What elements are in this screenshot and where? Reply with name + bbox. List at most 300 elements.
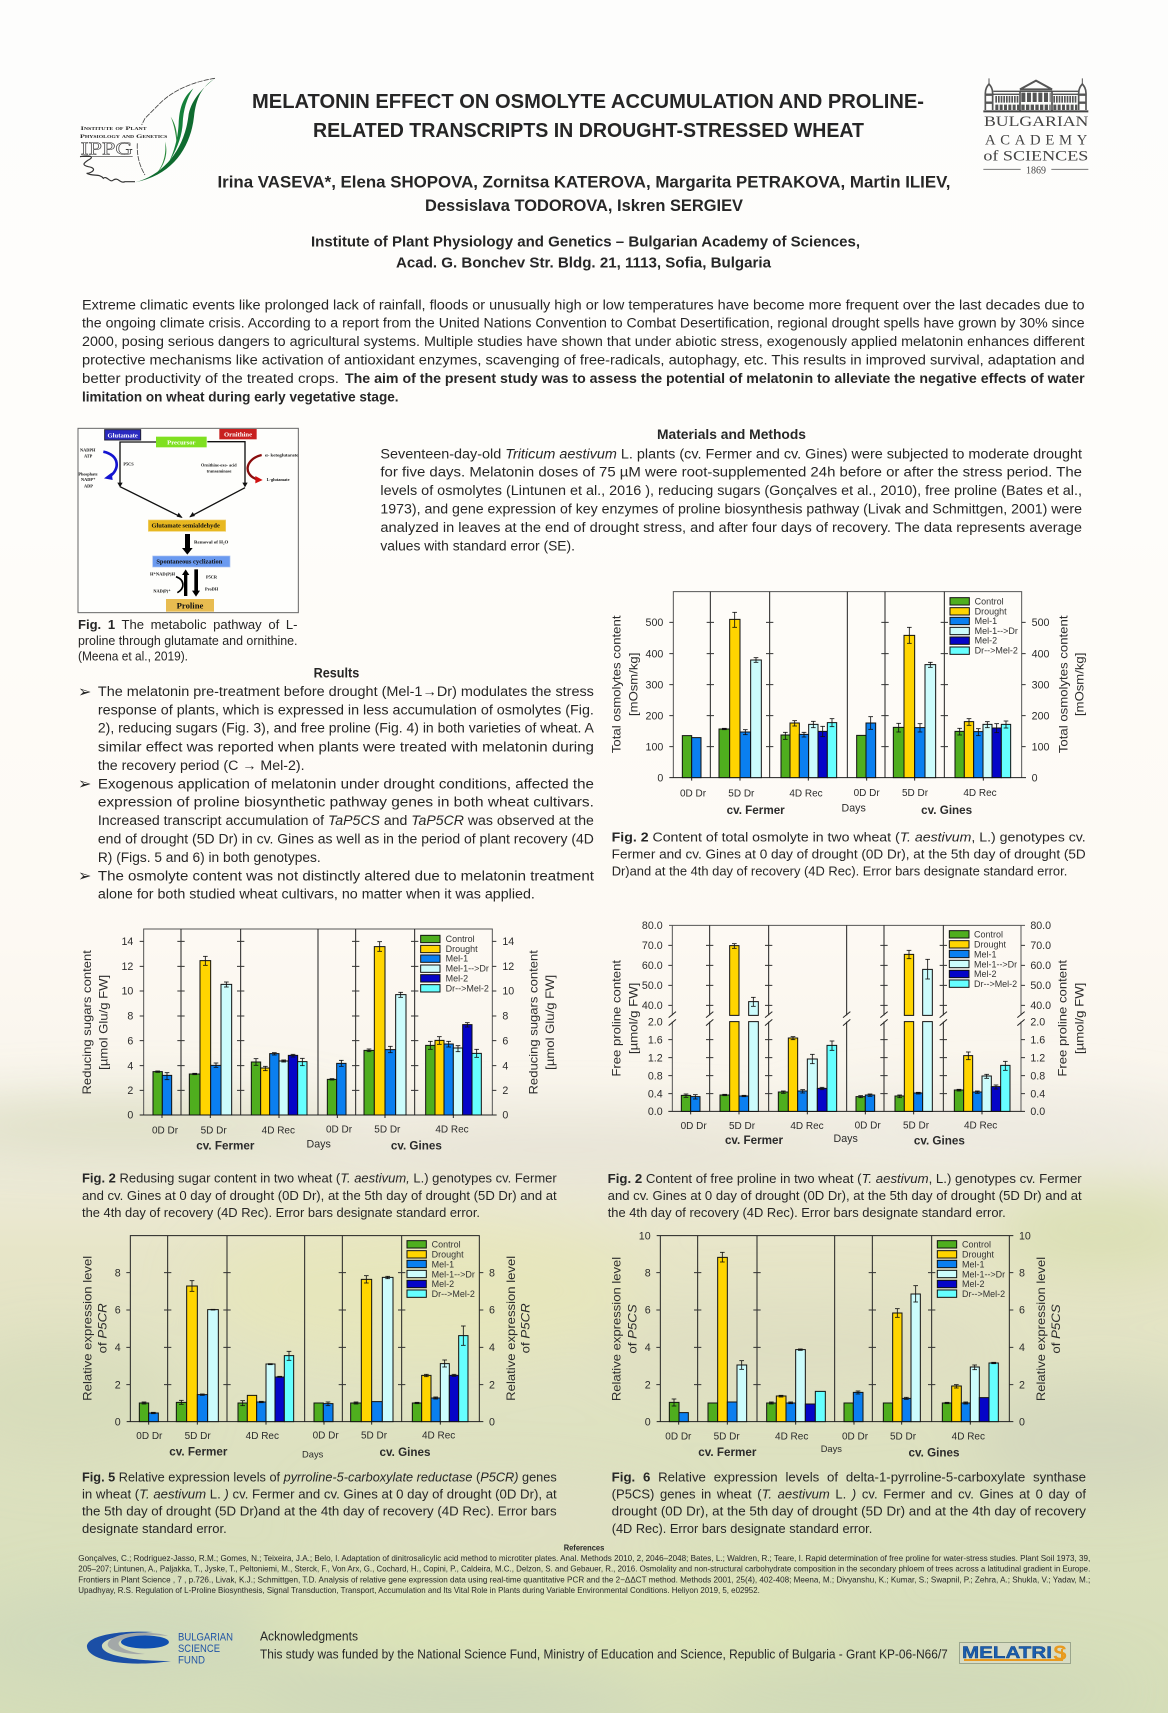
y axis labels: of P5CR: [97, 1303, 110, 1353]
introduction text: the ongoing climate crisis. According to a report from the United Nations Convention to Combat Desertification, regional drought spells have grown by 30% since: [82, 316, 1085, 331]
caption: reducing sugar: [82, 1171, 557, 1220]
legend: Mel-1: [446, 954, 468, 964]
y axis labels: 50.0: [642, 980, 663, 992]
y axis labels: 60.0: [642, 960, 663, 972]
results: Exogenous application of melatonin under drought conditions, affected the: [98, 776, 594, 791]
y axis labels: 1.2: [1030, 1052, 1045, 1064]
legend: Mel-1-->Dr: [975, 626, 1018, 636]
caption: reducing sugar: and cv. Gines at 0 day of drought (0D Dr), at the 5th day of drought (5D Dr) and at: [82, 1188, 557, 1203]
y axis labels: 70.0: [1030, 940, 1051, 952]
results: [78, 666, 594, 902]
materials and methods: for five days. Melatonin doses of 75 µM were root-supplemented 24h before or after the stress period. The: [380, 465, 1082, 480]
y axis labels: 400: [1032, 648, 1050, 660]
legend: Control: [974, 930, 1003, 940]
y axis labels: 300: [646, 679, 663, 691]
x axis labels: 0D Dr: [665, 1431, 692, 1442]
materials and methods: Materials and Methods: [657, 427, 806, 442]
y axis labels: 8: [115, 1267, 121, 1279]
legend: Dr-->Mel-2: [975, 646, 1018, 656]
references: 205–207; Lintunen, A., Paljakka, T., Jyske, T., Peltoniemi, M., Sterck, F., Von Arx, G., Cochard, H., Copini, P., Caldeira, M.C., Delzon, S. and Gebauer, R., 2016. Osmolality and non-structural carbohydrate composition in the secondary phloem of trees across a latitudinal gradient in Europe.: [78, 1565, 1090, 1574]
y axis labels: 4: [115, 1342, 121, 1354]
x axis labels: 5D Dr: [728, 789, 755, 800]
legend: Control: [975, 596, 1004, 606]
x axis labels: [681, 1120, 997, 1148]
x axis labels: cv. Fermer: [169, 1445, 228, 1458]
legend: [421, 934, 489, 993]
legend: Mel-1-->Dr: [446, 964, 489, 974]
introduction text: The aim of the present study was to assess the potential of melatonin to alleviate the negative effects of water: [345, 371, 1085, 386]
y axis labels: 60.0: [1030, 960, 1051, 972]
logo: Bulgarian Academy of Sciences: of SCIENCES: [983, 149, 1088, 165]
y axis labels: [µmol/g FW]: [1073, 983, 1086, 1054]
x axis labels: 4D Rec: [262, 1125, 295, 1136]
legend: Drought: [975, 606, 1007, 616]
caption: figure 6: (P5CS) genes in wheat (T. aestivum L. ) cv. Fermer and cv. Gines at 0 day of: [612, 1486, 1086, 1501]
materials and methods: Seventeen-day-old Triticum aestivum L. plants (cv. Fermer and cv. Gines) were subjected to moderate drought: [380, 446, 1082, 461]
y axis labels: 500: [646, 617, 663, 629]
affiliation: Institute of Plant Physiology and Genetics – Bulgarian Academy of Sciences,: [311, 234, 860, 250]
x axis labels: cv. Fermer: [725, 1134, 784, 1147]
y axis labels: 10: [639, 1230, 651, 1242]
y axis labels: 12: [502, 961, 514, 973]
references: Gonçalves, C.; Rodriguez-Jasso, R.M.; Gomes, N.; Teixeira, J.A.; Belo, I. Adaptation of dinitrosalicylic acid method to microtiter plates. Anal. Methods 2010, 2, 2046–2048; Bates, L.; Waldren, R.; Teare, I. Rapid determination of free proline for water-stress studies. Plant Soil 1973, 39,: [78, 1554, 1090, 1563]
legend: Mel-2: [975, 636, 997, 646]
figure 1: proline metabolic pathway: α- ketoglutarate: [265, 453, 298, 458]
y axis labels: 0.4: [1030, 1088, 1045, 1100]
y axis labels: 8: [127, 1011, 133, 1023]
figure 1 caption: (Meena et al., 2019).: [78, 649, 188, 664]
figure 1: proline metabolic pathway: H⁺NAD(P)H: [150, 572, 176, 577]
legend: Control: [962, 1240, 991, 1250]
figure 1: proline metabolic pathway: Proline: [177, 601, 204, 611]
authors: Irina VASEVA*, Elena SHOPOVA, Zornitsa KATEROVA, Margarita PETRAKOVA, Martin ILIEV,: [218, 174, 950, 192]
y axis labels: Total osmolytes content: [1057, 615, 1070, 753]
y axis labels: [mOsm/kg]: [627, 653, 640, 716]
y axis labels: Reducing sugars content: [528, 949, 541, 1094]
y axis labels: [81, 936, 557, 1122]
y axis labels: [611, 615, 1087, 784]
introduction text: Extreme climatic events like prolonged lack of rainfall, floods or unusually high or low temperatures have become more frequent over the last decades due to: [82, 297, 1085, 312]
bars: [682, 612, 1011, 778]
y axis labels: 0.0: [1030, 1106, 1045, 1118]
figure 1: proline metabolic pathway: NADPH: [80, 448, 96, 453]
y axis labels: Free proline content: [1057, 959, 1070, 1077]
y axis labels: 1.6: [648, 1034, 663, 1046]
chart: reducing sugars content: [81, 929, 557, 1152]
y axis labels: 6: [489, 1305, 495, 1317]
caption: figure 5: [82, 1469, 557, 1536]
y axis labels: 8: [489, 1267, 495, 1279]
y axis labels: 100: [646, 741, 663, 753]
y axis labels: Total osmolytes content: [611, 615, 624, 753]
y axis labels: 8: [1019, 1267, 1025, 1279]
legend: [407, 1240, 475, 1299]
legend: Mel-1-->Dr: [974, 959, 1017, 969]
y axis labels: Relative expression level: [81, 1256, 94, 1401]
y axis labels: 0: [489, 1416, 495, 1428]
y axis labels: 0: [127, 1110, 133, 1122]
results: ➢: [78, 682, 91, 701]
legend: Dr-->Mel-2: [962, 1289, 1005, 1299]
y axis labels: 200: [646, 710, 663, 722]
x axis labels: 4D Rec: [963, 788, 997, 799]
y axis labels: 0: [1032, 772, 1038, 784]
y axis labels: 6: [127, 1035, 133, 1047]
introduction text: limitation on wheat during early vegetative stage.: [82, 390, 398, 405]
x axis labels: [136, 1430, 455, 1460]
results: expression of proline biosynthetic pathway genes in both wheat cultivars.: [98, 795, 594, 810]
y axis labels: 10: [502, 986, 514, 998]
x axis labels: cv. Gines: [391, 1139, 442, 1152]
y axis labels: 100: [1032, 741, 1050, 753]
caption: reducing sugar: Fig. 2 Redusing sugar content in two wheat (T. aestivum, L.) genotypes cv. Fermer: [82, 1171, 557, 1186]
references: Frontiers in Plant Science , 7 , p.726., Livak, K.J.; Schmittgen, T.D. Analysis of relative gene expression data using real-time quantitative PCR and the 2−ΔΔCT method. Methods 2001, 25(4), 402-408; Meena, M.; Divyanshu, K.; Kumar, S.; Swapnil, P.; Zehra, A.; Shukla, V.; Yadav, M.;: [78, 1575, 1090, 1584]
figure 1: proline metabolic pathway: P5CS: [123, 461, 134, 466]
chart: total osmolytes content: [611, 592, 1087, 817]
x axis labels: 4D Rec: [789, 789, 823, 800]
results: the recovery period (C → Mel-2).: [98, 758, 305, 773]
logo: MelaTriS: S: [1053, 1642, 1067, 1665]
y axis labels: 50.0: [1030, 980, 1051, 992]
caption: total osmolyte: [612, 830, 1086, 879]
y axis labels: [611, 1230, 1063, 1428]
y axis labels: 6: [502, 1035, 508, 1047]
y axis labels: 0.0: [648, 1106, 663, 1118]
y axis labels: [mOsm/kg]: [1074, 653, 1087, 716]
y axis labels: of P5CS: [1050, 1304, 1063, 1354]
x axis labels: 0D Dr: [681, 1121, 707, 1132]
logo: MelaTriS: MELATRI: [962, 1643, 1052, 1662]
results: end of drought (5D Dr) in cv. Gines as well as in the period of plant recovery (4D: [98, 832, 594, 847]
figure 1: proline metabolic pathway: Ornithine-oxo- acid: [201, 462, 237, 467]
title: RELATED TRANSCRIPTS IN DROUGHT-STRESSED WHEAT: [313, 119, 864, 142]
introduction text: 2000, posing serious dangers to agricultural systems. Multiple studies have shown that under abiotic stress, exogenously applied melatonin enhances different: [82, 334, 1085, 349]
y axis labels: 1.6: [1030, 1034, 1045, 1046]
results: alone for both studied wheat cultivars, no matter when it was applied.: [98, 887, 535, 902]
acknowledgments: This study was funded by the National Science Fund, Ministry of Education and Science, Republic of Bulgaria - Grant KP-06-N66/7: [260, 1647, 948, 1662]
y axis labels: 500: [1032, 617, 1050, 629]
x axis labels: 0D Dr: [152, 1125, 179, 1136]
title: [252, 90, 924, 142]
legend: Control: [446, 934, 475, 944]
x axis labels: 5D Dr: [714, 1431, 740, 1442]
y axis labels: 0.8: [648, 1070, 663, 1082]
x axis labels: 0D Dr: [855, 1120, 881, 1131]
figure 1: proline metabolic pathway: NADP⁺: [81, 477, 95, 482]
logo: Bulgarian Academy of Sciences: BULGARIAN: [984, 114, 1089, 130]
y axis labels: 6: [645, 1305, 651, 1317]
legend: [937, 1240, 1005, 1299]
x axis labels: 5D Dr: [729, 1121, 756, 1132]
y axis labels: 14: [502, 936, 514, 948]
y axis labels: 0: [502, 1110, 508, 1122]
figure 1: proline metabolic pathway: Removal of H₂O: [194, 540, 229, 545]
y axis labels: 2: [1019, 1379, 1025, 1391]
caption: total osmolyte: Fermer and cv. Gines at 0 day of drought (0D Dr), at the 5th day of drought (5D: [612, 847, 1086, 862]
y axis labels: 1.2: [648, 1052, 663, 1064]
figure 1: proline metabolic pathway: Spontaneous cyclization: [156, 558, 223, 565]
legend: Mel-1-->Dr: [432, 1269, 475, 1279]
legend: Dr-->Mel-2: [974, 979, 1017, 989]
references: Upadhyay, R.S. Regulation of L-Proline Biosynthesis, Signal Transduction, Transport, Accumulation and Its Vital Role in Plants during Variable Environmental Conditions. Heliyon 2019, 5, e02952.: [78, 1586, 760, 1595]
legend: Drought: [432, 1250, 464, 1260]
legend: Mel-1: [974, 949, 996, 959]
y axis labels: 0.4: [648, 1088, 663, 1100]
bars: [669, 1252, 998, 1422]
logo: Bulgarian Academy of Sciences: 1869: [1026, 165, 1046, 176]
x axis labels: 4D Rec: [790, 1121, 824, 1132]
y axis labels: Reducing sugars content: [81, 949, 94, 1094]
x axis labels: 0D Dr: [680, 789, 707, 800]
y axis labels: 4: [502, 1060, 508, 1072]
affiliation: [311, 234, 860, 272]
caption: reducing sugar: the 4th day of recovery (4D Rec). Error bars designate standard error.: [82, 1205, 480, 1220]
materials and methods: values with standard error (SE).: [380, 538, 575, 553]
legend: Dr-->Mel-2: [446, 983, 489, 993]
figure 1: proline metabolic pathway: ATP: [84, 454, 93, 459]
caption: figure 6: [612, 1469, 1087, 1536]
logo: Institute of Plant Physiology and Genetics: [80, 78, 215, 182]
x axis labels: 0D Dr: [326, 1125, 353, 1136]
introduction text: [82, 297, 1085, 405]
y axis labels: 200: [1032, 710, 1050, 722]
x axis labels: cv. Gines: [909, 1447, 959, 1460]
materials and methods: [380, 427, 1082, 553]
y axis labels: 2.0: [648, 1016, 663, 1028]
introduction text: better productivity of the treated crops.: [82, 371, 339, 386]
x axis labels: 5D Dr: [185, 1431, 211, 1442]
acknowledgments: [260, 1628, 948, 1662]
materials and methods: 1973), and gene expression of key enzymes of proline biosynthesis pathway (Livak and Schmittgen, 2001) were: [380, 502, 1082, 517]
logo: MelaTriS: [960, 1642, 1070, 1665]
y axis labels: 12: [121, 961, 133, 973]
y axis labels: [81, 1256, 532, 1428]
y axis labels: of P5CR: [519, 1303, 532, 1353]
legend: [950, 596, 1018, 656]
figure 1 caption: [78, 617, 298, 664]
y axis labels: 8: [502, 1011, 508, 1023]
chart: relative expression P5CS: [611, 1230, 1063, 1460]
x axis labels: Days: [307, 1139, 331, 1151]
figure 1: proline metabolic pathway: NAD(P)⁺: [153, 588, 171, 593]
figure 1: proline metabolic pathway: Ornithine: [224, 432, 252, 439]
results: R) (Figs. 5 and 6) in both genotypes.: [98, 850, 321, 865]
x axis labels: 5D Dr: [890, 1431, 917, 1442]
x axis labels: 4D Rec: [246, 1431, 279, 1442]
title: MELATONIN EFFECT ON OSMOLYTE ACCUMULATION AND PROLINE-: [252, 90, 924, 113]
y axis labels: 80.0: [1030, 920, 1051, 932]
x axis labels: cv. Gines: [921, 804, 972, 817]
x axis labels: [152, 1125, 469, 1152]
results: similar effect was reported when plants were treated with melatonin during: [98, 739, 594, 754]
logo: Bulgarian Science Fund: SCIENCE: [178, 1643, 220, 1655]
legend: Mel-2: [974, 969, 996, 979]
acknowledgments: Acknowledgments: [260, 1628, 358, 1643]
results: 2), reducing sugars (Fig. 3), and free proline (Fig. 4) in both varieties of wheat. A: [98, 721, 594, 736]
legend: Mel-1: [432, 1259, 454, 1269]
references: References: [564, 1543, 605, 1552]
y axis labels: 14: [121, 936, 133, 948]
y axis labels: 2.0: [1030, 1016, 1045, 1028]
materials and methods: levels of osmolytes (Lintunen et al., 2016 ), reducing sugars (Gonçalves et al., 2010), free proline (Bates et al.,: [380, 483, 1082, 498]
results: ➢: [78, 774, 91, 793]
results: response of plants, which is expressed in less accumulation of osmolytes (Fig.: [98, 702, 594, 717]
chart: free proline content: [611, 920, 1086, 1148]
y axis labels: [µmol Glu/g FW]: [97, 975, 110, 1070]
y axis labels: of P5CS: [627, 1304, 640, 1354]
results: Increased transcript accumulation of TaP5CS and TaP5CR was observed at the: [98, 813, 594, 828]
y axis labels: [µmol Glu/g FW]: [544, 975, 557, 1070]
x axis labels: 5D Dr: [201, 1125, 227, 1136]
x axis labels: [665, 1431, 985, 1460]
y axis labels: 0: [1019, 1416, 1025, 1428]
logo: Bulgarian Science Fund: [87, 1632, 233, 1666]
caption: free proline: Fig. 2 Content of free proline in two wheat ( T. aestivum, L.) genotypes cv. Fermer: [608, 1171, 1082, 1186]
figure 1: proline metabolic pathway: ProDH: [205, 587, 219, 592]
legend: Drought: [962, 1250, 994, 1260]
x axis labels: cv. Fermer: [698, 1446, 757, 1459]
logo: Bulgarian Academy of Sciences: [983, 78, 1089, 176]
y axis labels: 10: [1019, 1230, 1031, 1242]
caption: figure 6: Fig. 6 Relative expression levels of delta-1-pyrroline-5-carboxylate synthase: [612, 1469, 1086, 1484]
legend: Drought: [446, 944, 478, 954]
caption: figure 5: the 5th day of drought (5D Dr)and at the 4th day of recovery (4D Rec). Error bars: [82, 1504, 557, 1519]
results: Results: [314, 666, 359, 681]
y axis labels: 40.0: [1030, 1000, 1051, 1012]
results: ➢: [78, 866, 91, 885]
x axis labels: 4D Rec: [435, 1125, 469, 1136]
caption: total osmolyte: Fig. 2 Content of total osmolyte in two wheat ( T. aestivum , L.) genotypes cv.: [612, 830, 1086, 845]
x axis labels: 0D Dr: [136, 1431, 163, 1442]
x axis labels: cv. Gines: [380, 1446, 430, 1459]
logo: Institute of Plant Physiology and Genetics: IPPG: [81, 139, 133, 159]
logo: Bulgarian Academy of Sciences: ACADEMY: [985, 132, 1088, 148]
x axis labels: 4D Rec: [952, 1431, 985, 1442]
y axis labels: 0: [645, 1416, 651, 1428]
caption: figure 5: Fig. 5 Relative expression levels of pyrroline-5-carboxylate reductase (P5CR) genes: [82, 1469, 557, 1484]
legend: Mel-1: [975, 616, 997, 626]
legend: Mel-1-->Dr: [962, 1269, 1005, 1279]
bars: [139, 1276, 468, 1422]
caption: free proline: and cv. Gines at 0 day of drought (0D Dr), at the 5th day of drought (5D Dr) and at: [608, 1188, 1082, 1203]
chart: relative expression P5CR: [81, 1236, 532, 1460]
y axis labels: Relative expression level: [611, 1257, 624, 1401]
x axis labels: 0D Dr: [854, 788, 880, 799]
y axis labels: Free proline content: [611, 959, 624, 1077]
y axis labels: Relative expression level: [505, 1256, 518, 1401]
legend: Dr-->Mel-2: [432, 1289, 475, 1299]
y axis labels: 4: [489, 1342, 495, 1354]
y axis labels: 40.0: [642, 1000, 663, 1012]
x axis labels: 5D Dr: [902, 788, 929, 799]
y axis labels: 70.0: [642, 940, 663, 952]
bars: [153, 942, 481, 1115]
figure 1: proline metabolic pathway: L-glutamate: [267, 477, 290, 482]
y axis labels: 2: [489, 1379, 495, 1391]
references: [78, 1543, 1090, 1595]
x axis labels: 5D Dr: [903, 1120, 930, 1131]
materials and methods: analyzed in leaves at the end of drought stress, and after four days of recovery. The data represents average: [380, 520, 1082, 535]
authors: Dessislava TODOROVA, Iskren SERGIEV: [425, 197, 743, 215]
figure 1 caption: Fig. 1 The metabolic pathway of L-: [78, 617, 298, 632]
legend: Control: [432, 1240, 461, 1250]
caption: figure 5: in wheat (T. aestivum L. ) cv. Fermer and cv. Gines at 0 day of drought (0D Dr), at: [82, 1486, 557, 1501]
caption: figure 5: designate standard error.: [82, 1521, 227, 1536]
figure 1 caption: proline through glutamate and ornithine.: [78, 633, 298, 648]
introduction text: protective mechanisms like activation of antioxidant enzymes, scavenging of free-radicals, autophagy, etc. This results in improved survival, adaptation and: [82, 353, 1085, 368]
x axis labels: Days: [821, 1444, 842, 1454]
x axis labels: 0D Dr: [313, 1430, 339, 1441]
caption: free proline: the 4th day of recovery (4D Rec). Error bars designate standard error.: [608, 1205, 1006, 1220]
x axis labels: Days: [834, 1133, 858, 1145]
legend: Mel-2: [432, 1279, 454, 1289]
figure 1: proline metabolic pathway: Glutamate semialdehyde: [151, 523, 220, 530]
y axis labels: Relative expression level: [1035, 1257, 1048, 1401]
y axis labels: [µmol/g FW]: [627, 983, 640, 1054]
y axis labels: 2: [502, 1085, 508, 1097]
y axis labels: 80.0: [642, 920, 663, 932]
x axis labels: 4D Rec: [775, 1431, 808, 1442]
caption: figure 6: (4D Rec). Error bars designate standard error.: [612, 1521, 872, 1536]
x axis labels: 4D Rec: [964, 1120, 997, 1131]
legend: Mel-2: [962, 1279, 984, 1289]
y axis labels: 2: [645, 1379, 651, 1391]
caption: total osmolyte: Dr)and at the 4th day of recovery (4D Rec). Error bars designate standard error.: [612, 864, 1067, 879]
y axis labels: 10: [121, 986, 133, 998]
legend: Mel-2: [446, 973, 468, 983]
logo: Bulgarian Science Fund: BULGARIAN: [178, 1632, 233, 1644]
y axis labels: 0: [657, 772, 663, 784]
figure 1: proline metabolic pathway: [78, 428, 298, 613]
y axis labels: 8: [645, 1267, 651, 1279]
figure 1: proline metabolic pathway: Phosphate: [78, 472, 98, 477]
x axis labels: cv. Fermer: [196, 1139, 255, 1152]
x axis labels: cv. Gines: [914, 1135, 965, 1148]
logo: Institute of Plant Physiology and Genetics: Physiology and Genetics: [80, 134, 168, 140]
y axis labels: 2: [127, 1085, 133, 1097]
logo: Institute of Plant Physiology and Genetics: Institute of Plant: [81, 126, 147, 132]
y axis labels: 0.8: [1030, 1070, 1045, 1082]
caption: figure 6: drought (0D Dr), at the 5th day of drought (5D Dr) and at the 4th day of recovery: [612, 1504, 1087, 1519]
figure 1: proline metabolic pathway: transaminase: [207, 469, 232, 474]
x axis labels: cv. Fermer: [727, 804, 785, 817]
figure 1: proline metabolic pathway: ADP: [84, 483, 93, 488]
logo: Bulgarian Science Fund: FUND: [178, 1654, 205, 1666]
figure 1: proline metabolic pathway: Glutamate: [108, 432, 138, 439]
affiliation: Acad. G. Bonchev Str. Bldg. 21, 1113, Sofia, Bulgaria: [396, 256, 772, 272]
x axis labels: Days: [842, 802, 866, 814]
x axis labels: 5D Dr: [361, 1430, 388, 1441]
legend: Drought: [974, 940, 1006, 950]
y axis labels: 2: [115, 1379, 121, 1391]
bars: [681, 944, 1010, 1111]
legend: [949, 930, 1017, 989]
y axis labels: 0: [115, 1416, 121, 1428]
figure 1: proline metabolic pathway: Precursor: [167, 439, 196, 446]
x axis labels: 5D Dr: [374, 1125, 401, 1136]
y axis labels: 300: [1032, 679, 1050, 691]
results: The osmolyte content was not distinctly altered due to melatonin treatment: [98, 868, 594, 883]
x axis labels: 4D Rec: [422, 1430, 455, 1441]
y axis labels: [611, 920, 1086, 1118]
y axis labels: 400: [646, 648, 663, 660]
y axis labels: 4: [127, 1060, 133, 1072]
figure 1: proline metabolic pathway: P5CR: [206, 574, 218, 579]
y axis labels: 4: [1019, 1342, 1025, 1354]
x axis labels: [680, 788, 997, 817]
caption: free proline: [608, 1171, 1082, 1220]
y axis labels: 4: [645, 1342, 651, 1354]
